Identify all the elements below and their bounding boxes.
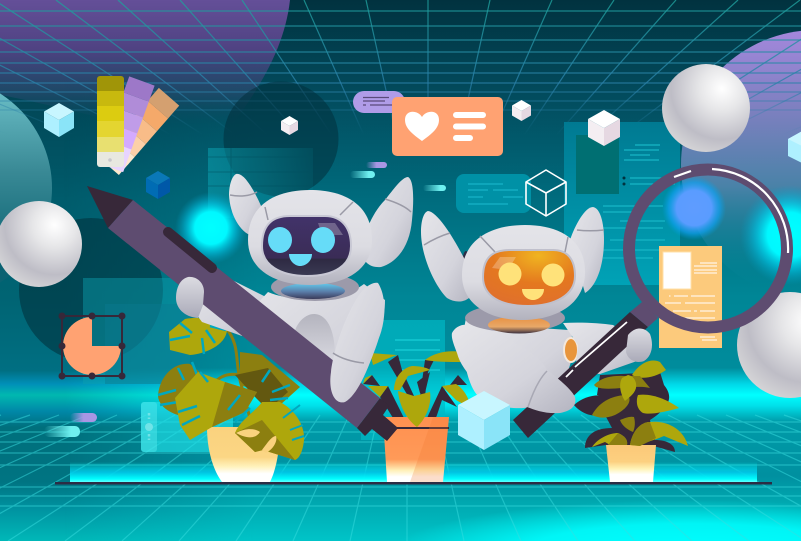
glowing platform: [55, 462, 772, 484]
rounded text panel: [456, 174, 531, 213]
sphere left: [0, 201, 82, 287]
stems: [205, 328, 252, 430]
smile: [289, 254, 312, 266]
cube: small white: [281, 116, 298, 135]
screen panel lower left: [83, 278, 190, 384]
robot right: raised right ear arm: [570, 207, 604, 293]
leaf: dark left: [158, 364, 215, 415]
pen slot: [168, 232, 212, 268]
pie chart with selection frame: [58, 312, 126, 380]
cube: white right: [588, 110, 620, 146]
side light: [564, 338, 578, 362]
card with heart: [392, 97, 503, 156]
colour swatch fan: [97, 76, 179, 175]
dark foliage: [574, 372, 675, 452]
swatch: purple: [98, 76, 155, 172]
purple blob top left: [0, 0, 290, 141]
neck ring: [271, 273, 359, 301]
leaves: [632, 361, 666, 378]
speed streaks upper: [350, 162, 446, 191]
chest panel: [293, 314, 335, 362]
screen panel upper centre: [208, 148, 313, 218]
large screen panel right: [564, 122, 680, 285]
robot right: big arm: [452, 325, 575, 413]
handle: [513, 312, 648, 438]
pot: yellow: [207, 427, 280, 482]
pot: orange: [383, 417, 449, 482]
plant: monstera: [158, 318, 304, 482]
smile: [522, 289, 544, 300]
cube: light blue left: [44, 103, 74, 137]
screen panel lower centre: [361, 320, 445, 440]
cube: dark blue: [146, 171, 170, 199]
plant: right foliage: [574, 361, 688, 482]
orange document: [659, 246, 722, 348]
icon: heart: [405, 112, 439, 141]
robot right: raised left ear arm: [421, 211, 473, 302]
right arm: [563, 323, 640, 374]
leaves: [398, 391, 430, 427]
seams: [480, 236, 568, 252]
sphere top right: [662, 64, 750, 152]
glow lights: [175, 176, 801, 285]
cube: light blue at right edge: [788, 129, 801, 165]
robot left: raised right arm: [362, 177, 413, 267]
screen panel on floor left: [141, 402, 233, 452]
sphere lower right: [737, 292, 801, 398]
plant: centre potted: [363, 351, 470, 482]
dark circle behind first robot: [224, 82, 338, 196]
visor: [262, 216, 351, 276]
leaf: lower right: [235, 402, 304, 460]
stylus pen: [87, 186, 398, 441]
robot left: body and left arm: [190, 273, 385, 402]
teal circle left: [0, 76, 52, 300]
ceiling grid: [0, 0, 801, 140]
swatch: orange: [98, 88, 179, 175]
leaf: front bright: [175, 372, 257, 440]
robot left: big right arm: [330, 283, 384, 402]
cube: large light blue: [458, 391, 510, 450]
robot right: head: [462, 225, 585, 320]
handle highlight: [566, 322, 627, 377]
chat bubble purple: [353, 91, 405, 113]
eyes: [498, 262, 522, 286]
eyes: [268, 227, 292, 253]
robot left: hand: [176, 277, 204, 318]
pen end cap: [357, 398, 398, 441]
pot: tan: [606, 445, 656, 482]
purple circle right: [681, 30, 801, 300]
neck ring: [465, 304, 565, 332]
stems: [363, 355, 467, 418]
robot left: raised left ear arm: [229, 174, 262, 236]
cube: white centre: [512, 100, 531, 121]
visor: [483, 250, 575, 306]
magnifying glass: [513, 169, 788, 438]
pen body: [108, 200, 380, 428]
leaf: top: [169, 318, 227, 355]
collar: [630, 302, 658, 327]
speed streaks lower left: [44, 413, 97, 437]
swatch: yellow: [97, 76, 124, 167]
robot right: body: [464, 304, 640, 408]
robot right: hand: [626, 328, 652, 362]
dark circle lower left: [19, 218, 163, 362]
lens highlights: [674, 169, 788, 253]
cube: wireframe outline: [526, 170, 566, 216]
pen tip: [87, 186, 133, 228]
floor grid: [0, 415, 801, 541]
leaf: dark back right: [240, 352, 300, 412]
robot left: head: [248, 190, 372, 285]
seams: [265, 202, 353, 220]
lens ring: [629, 170, 787, 328]
